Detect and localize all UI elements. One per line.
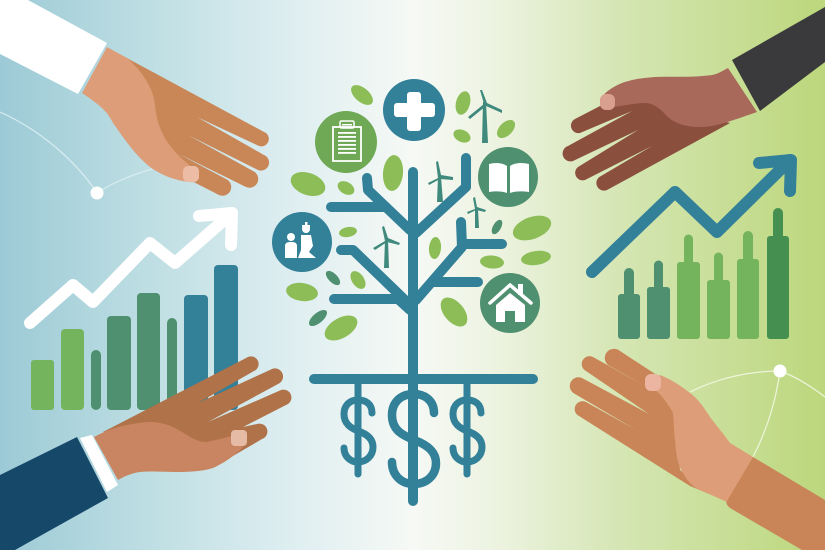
fingers and back of hand [563,100,730,191]
dark sleeve [732,7,825,111]
hand: top left with white sleeve [0,0,269,196]
icon: clipboard [315,111,377,173]
fingers and back of hand [103,356,291,456]
turbine 4 [373,226,400,268]
thumbnail [645,374,661,391]
thumbnail [231,430,247,446]
icon: house [480,273,540,333]
fingers and back of hand [570,349,707,493]
network line: bottom right [690,364,825,457]
turbine 2 [428,161,453,202]
hand: bottom right with tan sleeve [570,349,825,550]
icon: open book [478,147,538,207]
dollar roots [344,382,482,484]
hand: bottom left with navy sleeve [0,356,291,550]
palm [645,375,753,502]
thumbnail [183,166,199,182]
bottle-shaped bars [618,208,789,339]
bars [31,265,238,410]
white cuff [80,435,118,492]
thumbnail [600,94,615,110]
icon: medical cross [383,79,445,141]
wind turbines [373,90,502,268]
turbine 1 [468,90,502,143]
tree with dollar-sign roots [285,81,555,501]
bar chart with white arrow: left [30,213,238,410]
fingers and back of hand [125,57,269,196]
leaves [285,81,555,346]
white sleeve [0,0,107,94]
palm and thumb [600,68,757,127]
line and bar chart: right [592,160,791,339]
icon: caregiver and child [272,212,332,272]
navy sleeve [0,437,108,550]
teal rising arrow [592,160,791,272]
white rising arrow [30,213,232,323]
hand: top right with dark sleeve [563,7,825,191]
network line: top left [0,112,155,200]
turbine 3 [467,197,486,228]
palm and thumb [82,47,197,182]
palm [94,422,243,480]
tan sleeve [726,457,825,550]
trunk and branches [314,158,533,501]
